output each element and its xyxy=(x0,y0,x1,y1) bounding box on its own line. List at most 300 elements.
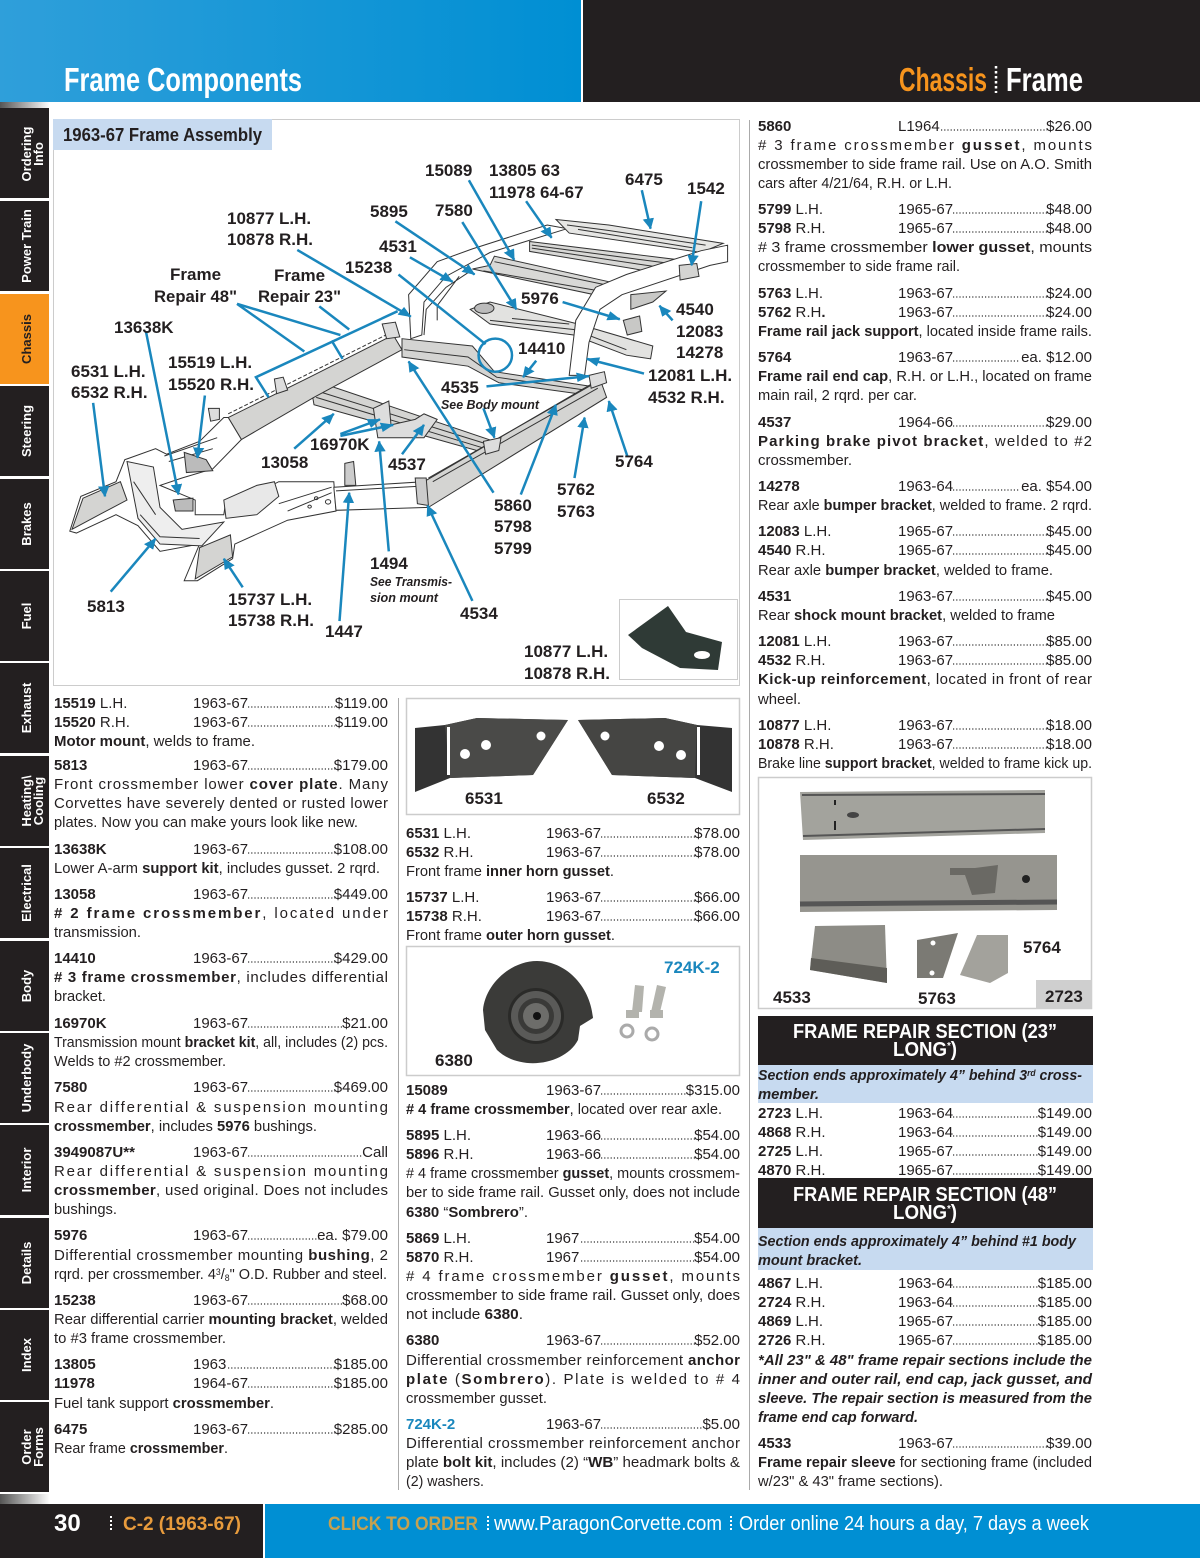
entry: 10877 support bracket: 1963-67 xyxy=(898,736,953,753)
entry: 15089 crossmember xyxy=(406,1082,740,1118)
entry: 5813 cover plate: Corvettes have severely dented or rusted lower xyxy=(54,795,388,812)
entry: 48 inch section prices: 2726 R.H. xyxy=(758,1332,826,1349)
entry: 13805 fuel tank support: 13805 xyxy=(54,1356,96,1373)
entry: 724K-2 bolt kit: $5.00 xyxy=(702,1416,740,1433)
note: repair sections include: inner and outer rail, end cap, jack gusset, and xyxy=(758,1371,1093,1388)
entry: 13638K support kit: $108.00 xyxy=(334,841,388,858)
sidebar navigation tabs xyxy=(0,108,49,1492)
entry: 4537 pivot bracket: Parking brake pivot bracket, welded to #2 xyxy=(758,433,1092,450)
banner: 48 inch frame repair section: * xyxy=(947,1204,951,1215)
heading: Frame Components: Frame Components xyxy=(64,61,302,98)
entry: 3949087U original crossmember: bushings. xyxy=(54,1201,117,1218)
part number labels: Repair 23" xyxy=(258,287,341,306)
entry: 15519 motor mount: 15520 R.H. xyxy=(54,714,130,731)
part number labels: 5976 xyxy=(521,289,559,308)
entry: 5895 gusset: 1963-66 xyxy=(546,1146,601,1163)
entry: 5895 gusset: # 4 frame crossmember gusset, mounts crossmem- xyxy=(406,1165,740,1182)
entry: 5869 gusset: not include 6380. xyxy=(406,1306,523,1323)
panel: 1963-67 frame assembly diagram xyxy=(53,119,740,686)
entry: 13058 crossmember xyxy=(54,886,388,941)
part number labels: 11978 64-67 xyxy=(489,183,584,202)
entry: 12083 bumper bracket: 4540 R.H. xyxy=(758,542,826,559)
entry: 5860 gusset: crossmember to side frame rail. Use on A.O. Smith xyxy=(758,156,1092,173)
entry: 15238 mounting bracket: 15238 xyxy=(54,1292,96,1309)
entry: 13638K support kit: 13638K xyxy=(54,841,107,858)
entry: 5976 bushing: 3 xyxy=(216,1267,221,1277)
entry: 12081 kick-up reinforcement: $85.00 xyxy=(1046,652,1092,669)
banner: 23 inch frame repair section: FRAME REPAIR SECTION (23” xyxy=(793,1021,1057,1043)
entry: 5764 end cap: Frame rail end cap, R.H. or L.H., located on frame xyxy=(758,368,1092,385)
entry: 23 inch section prices: 4868 R.H. xyxy=(758,1124,826,1141)
part number labels: 10877 L.H. xyxy=(227,209,311,228)
entry: 14278 bumper bracket: 14278 xyxy=(758,478,800,495)
entry: 15519 motor mount: 15519 L.H. xyxy=(54,695,127,712)
sidebar navigation tabs: Power Train xyxy=(19,209,34,283)
entry: 12081 kick-up reinforcement: 4532 R.H. xyxy=(758,652,826,669)
footer: page number and range: 30 xyxy=(54,1510,81,1537)
entry: 10877 support bracket xyxy=(758,717,1092,772)
entry: 724K-2 bolt kit: 1963-67 xyxy=(546,1416,601,1433)
part number labels: 1447 xyxy=(325,622,363,641)
entry: 13805 fuel tank support: $185.00 xyxy=(334,1375,388,1392)
entry: 5976 bushing: 1963-67 xyxy=(193,1227,248,1244)
photo: frame repair pieces: 5764 xyxy=(1023,938,1061,957)
entry: 15737 outer horn gusset: $66.00 xyxy=(694,908,740,925)
entry: 48 inch section prices: 4867 L.H. xyxy=(758,1275,823,1292)
entry: 5895 gusset: 5895 L.H. xyxy=(406,1127,471,1144)
part number labels: 13058 xyxy=(261,453,308,472)
entry: 15238 mounting bracket: $68.00 xyxy=(342,1292,388,1309)
header: black category band xyxy=(583,0,1200,102)
entry: 5976 bushing: 5976 xyxy=(54,1227,87,1244)
part number labels: 4531 xyxy=(379,237,417,256)
photo: frame repair pieces: 4533 xyxy=(773,988,811,1007)
photo: 6380 sombrero and 724K-2 bolt kit: 724K-2 xyxy=(664,958,720,977)
banner: 48 inch frame repair section: ) xyxy=(951,1202,957,1224)
entry: 7580 crossmember: Rear differential & suspension mounting xyxy=(54,1099,388,1116)
sidebar navigation tabs: Cooling xyxy=(31,777,46,825)
part number labels: 15520 R.H. xyxy=(168,375,254,394)
entry: 4531 shock mount bracket: Rear shock mount bracket, welded to frame xyxy=(758,607,1055,624)
entry: 5869 gusset: $54.00 xyxy=(694,1230,740,1247)
part number labels: 10878 R.H. xyxy=(524,664,610,683)
part number labels: 5813 xyxy=(87,597,125,616)
entry: 12083 bumper bracket: 1965-67 xyxy=(898,542,953,559)
column 2: parts list and photos xyxy=(406,698,740,1490)
entry: 7580 crossmember: 7580 xyxy=(54,1079,87,1096)
entry: 5869 gusset: 5870 R.H. xyxy=(406,1249,474,1266)
entry: 6531 inner horn gusset: 1963-67 xyxy=(546,844,601,861)
entry: 5799 lower gusset: $48.00 xyxy=(1046,220,1092,237)
entry: 4531 shock mount bracket xyxy=(758,588,1092,624)
part number labels: Repair 48" xyxy=(154,287,237,306)
part number labels: 5762 xyxy=(557,480,595,499)
entry: 5869 gusset: crossmember to side frame rail. Gusset only, does xyxy=(406,1287,740,1304)
part number labels: 16970K xyxy=(310,435,370,454)
entry: 23 inch section prices: $149.00 xyxy=(1038,1143,1092,1160)
part number labels: 5895 xyxy=(370,202,408,221)
entry: 14410 crossmember: # 3 frame crossmember, includes differential xyxy=(54,969,388,986)
entry: 5860 gusset: L1964 xyxy=(898,118,940,135)
part number labels: 14278 xyxy=(676,343,723,362)
entry: 724K-2 bolt kit: (2) washers. xyxy=(406,1473,484,1490)
footer: page number and range xyxy=(0,1504,263,1558)
entry: 6380 anchor plate: 6380 xyxy=(406,1332,439,1349)
part number labels: 15238 xyxy=(345,258,392,277)
note: section ends 4 inches behind body mount bracket: Section ends approximately 4” behind #1 body xyxy=(758,1233,1077,1250)
entry: 6531 inner horn gusset: $78.00 xyxy=(694,844,740,861)
entry: 5869 gusset: 1967 xyxy=(546,1230,579,1247)
entry: 23 inch section prices: 1963-64 xyxy=(898,1124,953,1141)
entry: 5799 lower gusset: 5799 L.H. xyxy=(758,201,823,218)
entry: 6475 rear crossmember: Rear frame crossmember. xyxy=(54,1440,228,1457)
entry: 15089 crossmember: 1963-67 xyxy=(546,1082,601,1099)
entry: 6380 anchor plate: $52.00 xyxy=(694,1332,740,1349)
note: repair sections include: *All 23" & 48" frame repair sections include the xyxy=(758,1352,1092,1369)
entry: 48 inch section prices: 1965-67 xyxy=(898,1313,953,1330)
entry: 15238 mounting bracket xyxy=(54,1292,388,1347)
entry: 5895 gusset: ber to side frame rail. Gusset only, does not include xyxy=(406,1184,740,1201)
entry: 4531 shock mount bracket: $45.00 xyxy=(1046,588,1092,605)
entry: 12083 bumper bracket xyxy=(758,523,1092,579)
entry: 4533 repair sleeve: w/23" & 43" frame sections). xyxy=(757,1473,943,1490)
entry: 15519 motor mount: Motor mount, welds to frame. xyxy=(54,733,255,750)
entry: 3949087U original crossmember: 1963-67 xyxy=(193,1144,248,1161)
entry: 16970K bracket kit: 16970K xyxy=(54,1015,107,1032)
entry: 724K-2 bolt kit xyxy=(406,1416,740,1490)
entry: 7580 crossmember: 1963-67 xyxy=(193,1079,248,1096)
part number labels: See Transmis- xyxy=(370,574,452,589)
entry: 48 inch section prices: $185.00 xyxy=(1038,1275,1092,1292)
entry: 7580 crossmember xyxy=(54,1079,388,1135)
entry: 5764 end cap: 5764 xyxy=(758,349,792,366)
entry: 6531 inner horn gusset: $78.00 xyxy=(694,825,740,842)
entry: 4533 repair sleeve: 1963-67 xyxy=(898,1435,953,1452)
entry: 15089 crossmember: $315.00 xyxy=(686,1082,740,1099)
entry: 5763 jack support xyxy=(758,285,1092,340)
photo: 6531 and 6532 gussets: 6531 xyxy=(465,789,503,808)
illustration: chassis frame xyxy=(70,220,728,581)
entry: 14278 bumper bracket xyxy=(758,478,1092,514)
entry: 10877 support bracket: $18.00 xyxy=(1046,717,1092,734)
sidebar navigation tabs: Order xyxy=(19,1429,34,1465)
entry: 48 inch section prices: 1963-64 xyxy=(898,1294,953,1311)
note: section ends 4 inches behind body mount bracket xyxy=(758,1228,1093,1270)
part number labels: 4535 xyxy=(441,378,479,397)
banner: 23 inch frame repair section: * xyxy=(947,1041,951,1052)
part number labels: 15738 R.H. xyxy=(228,611,314,630)
entry: 13805 fuel tank support: 1964-67 xyxy=(193,1375,248,1392)
entry: 12083 bumper bracket: 1965-67 xyxy=(898,523,953,540)
note: section ends 4 inches behind 3rd crossmember: member. xyxy=(758,1086,819,1103)
entry: 6475 rear crossmember xyxy=(54,1421,388,1457)
part number labels: 6532 R.H. xyxy=(71,383,148,402)
entry: 23 inch section prices: 2723 L.H. xyxy=(758,1105,823,1122)
entry: 13805 fuel tank support: Fuel tank support crossmember. xyxy=(54,1395,274,1412)
sidebar navigation tabs: Info xyxy=(31,142,46,166)
entry: 3949087U original crossmember: 3949087U** xyxy=(54,1144,135,1161)
inset photo: support bracket xyxy=(620,600,738,680)
entry: 15519 motor mount: 1963-67 xyxy=(193,714,248,731)
entry: 13805 fuel tank support: 11978 xyxy=(54,1375,95,1392)
entry: 13058 crossmember: transmission. xyxy=(54,924,141,941)
entry: 4537 pivot bracket xyxy=(758,414,1092,469)
part number labels: 10877 L.H. xyxy=(524,642,608,661)
entry: 13638K support kit: 1963-67 xyxy=(193,841,248,858)
entry: 12081 kick-up reinforcement: Kick-up reinforcement, located in front of rear xyxy=(758,671,1092,688)
entry: 5976 bushing: Differential crossmember mounting bushing, 2 xyxy=(54,1247,388,1264)
entry: 724K-2 bolt kit: Differential crossmember reinforcement anchor xyxy=(406,1435,740,1452)
entry: 5764 end cap xyxy=(758,349,1092,404)
entry: 16970K bracket kit: 1963-67 xyxy=(193,1015,248,1032)
entry: 15737 outer horn gusset: 15737 L.H. xyxy=(406,889,479,906)
sidebar navigation tabs: Exhaust xyxy=(19,682,34,733)
entry: 5895 gusset: 5896 R.H. xyxy=(406,1146,474,1163)
part number labels: 4537 xyxy=(388,455,426,474)
entry: 6531 inner horn gusset: 6532 R.H. xyxy=(406,844,474,861)
entry: 5976 bushing xyxy=(54,1227,388,1283)
entry: 4533 repair sleeve: $39.00 xyxy=(1046,1435,1092,1452)
sidebar navigation tabs: Ordering xyxy=(19,126,34,181)
sidebar navigation tabs: Interior xyxy=(19,1148,34,1192)
entry: 48 inch section prices: $185.00 xyxy=(1038,1294,1092,1311)
entry: 5860 gusset: cars after 4/21/64, R.H. or L.H. xyxy=(758,175,952,192)
sidebar navigation tabs: Details xyxy=(19,1242,34,1284)
entry: 23 inch section prices xyxy=(758,1105,1092,1179)
part number labels: 5860 xyxy=(494,496,532,515)
part number labels: 15737 L.H. xyxy=(228,590,312,609)
sidebar navigation tabs: Fuel xyxy=(19,603,34,629)
entry: 23 inch section prices: $149.00 xyxy=(1038,1124,1092,1141)
header: blue section band xyxy=(0,0,581,102)
part number labels: 6475 xyxy=(625,170,663,189)
part number labels: 5798 xyxy=(494,517,532,536)
entry: 6531 inner horn gusset: 6531 L.H. xyxy=(406,825,471,842)
entry: 12083 bumper bracket: Rear axle bumper bracket, welded to frame. xyxy=(758,562,1053,579)
entry: 12083 bumper bracket: $45.00 xyxy=(1046,523,1092,540)
entry: 14278 bumper bracket: Rear axle bumper bracket, welded to frame. 2 rqrd. xyxy=(758,497,1092,514)
entry: 14278 bumper bracket: 1963-64 xyxy=(898,478,953,495)
entry: 6475 rear crossmember: 1963-67 xyxy=(193,1421,248,1438)
entry: 15519 motor mount xyxy=(54,695,388,750)
entry: 5799 lower gusset: $48.00 xyxy=(1046,201,1092,218)
note: section ends 4 inches behind body mount bracket: mount bracket. xyxy=(758,1252,862,1269)
callout arrows xyxy=(93,180,701,621)
heading: frame assembly: 1963-67 Frame Assembly xyxy=(63,125,262,145)
entry: 5976 bushing: / xyxy=(221,1266,226,1283)
entry: 48 inch section prices xyxy=(758,1275,1092,1349)
entry: 5763 jack support: $24.00 xyxy=(1046,304,1092,321)
entry: 5860 gusset: 5860 xyxy=(758,118,791,135)
banner: 23 inch frame repair section xyxy=(758,1016,1093,1065)
part number labels: 4532 R.H. xyxy=(648,388,725,407)
entry: 5764 end cap: 1963-67 xyxy=(898,349,953,366)
photo: frame repair pieces xyxy=(758,778,1092,1009)
part number labels: 5799 xyxy=(494,539,532,558)
banner: 48 inch frame repair section: FRAME REPAIR SECTION (48” xyxy=(793,1184,1057,1206)
note: section ends 4 inches behind 3rd crossmember: cross- xyxy=(1036,1067,1082,1084)
part number labels: 5764 xyxy=(615,452,653,471)
entry: 15519 motor mount: $119.00 xyxy=(335,695,388,712)
photo: frame repair pieces: 5763 xyxy=(918,989,956,1008)
entry: 724K-2 bolt kit: 724K-2 xyxy=(406,1416,455,1433)
footer: order call to action: CLICK TO ORDER xyxy=(328,1514,478,1535)
entry: 5860 gusset: $26.00 xyxy=(1046,118,1092,135)
entry: 10877 support bracket: 10878 R.H. xyxy=(758,736,834,753)
part number labels: 4534 xyxy=(460,604,498,623)
entry: 12081 kick-up reinforcement: wheel. xyxy=(757,691,801,708)
sidebar navigation tabs: Steering xyxy=(19,405,34,457)
entry: 13638K support kit xyxy=(54,841,388,877)
entry: 5763 jack support: Frame rail jack support, located inside frame rails. xyxy=(758,323,1092,340)
entry: 6531 inner horn gusset: 1963-67 xyxy=(546,825,601,842)
entry: 5976 bushing: ea. $79.00 xyxy=(317,1227,388,1244)
entry: 5895 gusset: $54.00 xyxy=(694,1146,740,1163)
photo: frame repair pieces: 2723 xyxy=(1045,987,1083,1006)
entry: 6475 rear crossmember: $285.00 xyxy=(334,1421,388,1438)
entry: 4531 shock mount bracket: 4531 xyxy=(758,588,791,605)
entry: 5764 end cap: main rail, 2 rqrd. per car. xyxy=(758,387,917,404)
entry: 15737 outer horn gusset: 15738 R.H. xyxy=(406,908,482,925)
entry: 5764 end cap: ea. $12.00 xyxy=(1021,349,1092,366)
photo: 6531 and 6532 gussets: 6532 xyxy=(647,789,685,808)
column 3: parts list xyxy=(757,118,1093,1490)
sidebar navigation tabs: Underbody xyxy=(19,1043,34,1112)
part number labels: 1542 xyxy=(687,179,725,198)
entry: 5799 lower gusset xyxy=(758,201,1092,275)
entry: 13638K support kit: Lower A-arm support kit, includes gusset. 2 rqrd. xyxy=(54,860,380,877)
note: section ends 4 inches behind 3rd crossmember xyxy=(758,1065,1093,1103)
entry: 12083 bumper bracket: $45.00 xyxy=(1046,542,1092,559)
entry: 13058 crossmember: $449.00 xyxy=(334,886,388,903)
entry: 15737 outer horn gusset: Front frame outer horn gusset. xyxy=(406,927,615,944)
entry: 5763 jack support: 5762 R.H. xyxy=(758,304,826,321)
entry: 23 inch section prices: $149.00 xyxy=(1038,1162,1092,1179)
entry: 13058 crossmember: 1963-67 xyxy=(193,886,248,903)
note: repair sections include: frame end cap forward. xyxy=(758,1409,918,1426)
sidebar navigation tabs: Body xyxy=(19,969,34,1002)
photo: 6531 and 6532 gussets xyxy=(406,698,740,814)
entry: 5895 gusset: 1963-66 xyxy=(546,1127,601,1144)
entry: 13805 fuel tank support: $185.00 xyxy=(334,1356,388,1373)
entry: 13058 crossmember: 13058 xyxy=(54,886,96,903)
sidebar navigation tabs: Forms xyxy=(31,1427,46,1467)
entry: 12083 bumper bracket: 12083 L.H. xyxy=(758,523,831,540)
entry: 5799 lower gusset: 5798 R.H. xyxy=(758,220,826,237)
entry: 10877 support bracket: Brake line support bracket, welded to frame kick up. xyxy=(758,755,1092,772)
part number labels: 13638K xyxy=(114,318,174,337)
entry: 16970K bracket kit: Welds to #2 crossmember. xyxy=(54,1053,226,1070)
sidebar navigation tabs: Electrical xyxy=(19,864,34,922)
entry: 6380 anchor plate: 1963-67 xyxy=(546,1332,601,1349)
entry: 15089 crossmember: 15089 xyxy=(406,1082,448,1099)
entry: 6380 anchor plate: Differential crossmember reinforcement anchor xyxy=(406,1352,740,1369)
entry: 5799 lower gusset: 1965-67 xyxy=(898,220,953,237)
entry: 6380 anchor plate: plate (Sombrero). Plate is welded to # 4 xyxy=(406,1371,740,1388)
entry: 724K-2 bolt kit: plate bolt kit, includes (2) “WB” headmark bolts & xyxy=(406,1454,740,1471)
entry: 15238 mounting bracket: Rear differential carrier mounting bracket, welded xyxy=(54,1311,388,1328)
entry: 14410 crossmember xyxy=(54,950,388,1005)
entry: 23 inch section prices: 1963-64 xyxy=(898,1105,953,1122)
entry: 3949087U original crossmember: Rear differential & suspension mounting xyxy=(54,1163,388,1180)
entry: 15238 mounting bracket: to #3 frame crossmember. xyxy=(54,1330,226,1347)
note: repair sections include xyxy=(758,1352,1093,1426)
entry: 12081 kick-up reinforcement: 1963-67 xyxy=(898,633,953,650)
entry: 23 inch section prices: 2725 L.H. xyxy=(758,1143,823,1160)
entry: 5869 gusset: $54.00 xyxy=(694,1249,740,1266)
entry: 5869 gusset: # 4 frame crossmember gusset, mounts xyxy=(406,1268,740,1285)
entry: 4537 pivot bracket: 4537 xyxy=(758,414,791,431)
entry: 14410 crossmember: 14410 xyxy=(54,950,96,967)
note: section ends 4 inches behind 3rd crossmember: rd xyxy=(1027,1068,1036,1078)
part number labels: Frame xyxy=(170,265,221,284)
entry: 48 inch section prices: $185.00 xyxy=(1038,1313,1092,1330)
entry: 13805 fuel tank support xyxy=(54,1356,388,1412)
entry: 7580 crossmember: $469.00 xyxy=(334,1079,388,1096)
entry: 4533 repair sleeve: Frame repair sleeve for sectioning frame (included xyxy=(758,1454,1092,1471)
entry: 5813 cover plate: 1963-67 xyxy=(193,757,248,774)
entry: 5860 gusset: # 3 frame crossmember gusset, mounts xyxy=(758,137,1092,154)
entry: 5860 gusset xyxy=(758,118,1092,192)
entry: 4533 repair sleeve: 4533 xyxy=(758,1435,791,1452)
entry: 3949087U original crossmember: Call xyxy=(362,1144,388,1161)
header: black category band: Frame xyxy=(1006,61,1083,98)
footer: order call to action xyxy=(265,1504,1200,1558)
entry: 48 inch section prices: 1963-64 xyxy=(898,1275,953,1292)
part number labels: sion mount xyxy=(370,590,439,605)
entry: 6531 inner horn gusset: Front frame inner horn gusset. xyxy=(406,863,614,880)
entry: 13805 fuel tank support: 1963 xyxy=(193,1356,226,1373)
entry: 15737 outer horn gusset: 1963-67 xyxy=(546,889,601,906)
entry: 14410 crossmember: $429.00 xyxy=(334,950,388,967)
banner: 23 inch frame repair section: ) xyxy=(951,1039,957,1061)
entry: 5763 jack support: 1963-67 xyxy=(898,285,953,302)
entry: 10877 support bracket: 10877 L.H. xyxy=(758,717,831,734)
entry: 5813 cover plate xyxy=(54,757,388,831)
entry: 48 inch section prices: 1965-67 xyxy=(898,1332,953,1349)
part number labels: 13805 63 xyxy=(489,161,560,180)
entry: 6531 inner horn gusset xyxy=(406,825,740,880)
part number labels: 5763 xyxy=(557,502,595,521)
entry: 6380 anchor plate: crossmember gusset. xyxy=(406,1390,547,1407)
entry: 15737 outer horn gusset: $66.00 xyxy=(694,889,740,906)
entry: 48 inch section prices: 4869 L.H. xyxy=(758,1313,823,1330)
entry: 5869 gusset: 1967 xyxy=(546,1249,579,1266)
entry: 15089 crossmember: # 4 frame crossmember, located over rear axle. xyxy=(406,1101,722,1118)
entry: 4533 repair sleeve xyxy=(757,1435,1092,1490)
entry: 4531 shock mount bracket: 1963-67 xyxy=(898,588,953,605)
sidebar navigation tabs: Chassis xyxy=(19,314,34,364)
part number labels: 7580 xyxy=(435,201,473,220)
entry: 48 inch section prices: 2724 R.H. xyxy=(758,1294,826,1311)
photo: 6380 sombrero and 724K-2 bolt kit xyxy=(406,946,740,1076)
entry: 5763 jack support: 5763 L.H. xyxy=(758,285,823,302)
entry: 12081 kick-up reinforcement: 12081 L.H. xyxy=(758,633,831,650)
entry: 5895 gusset: $54.00 xyxy=(694,1127,740,1144)
entry: 15519 motor mount: $119.00 xyxy=(335,714,388,731)
entry: 5799 lower gusset: 1965-67 xyxy=(898,201,953,218)
entry: 3949087U original crossmember xyxy=(54,1144,388,1218)
entry: 12081 kick-up reinforcement xyxy=(757,633,1092,708)
entry: 16970K bracket kit: $21.00 xyxy=(342,1015,388,1032)
entry: 16970K bracket kit xyxy=(54,1015,388,1070)
entry: 14410 crossmember: 1963-67 xyxy=(193,950,248,967)
part number labels: 14410 xyxy=(518,339,565,358)
entry: 5869 gusset: 5869 L.H. xyxy=(406,1230,471,1247)
entry: 10877 support bracket: 1963-67 xyxy=(898,717,953,734)
part number labels: 10878 R.H. xyxy=(227,230,313,249)
part number labels: 1494 xyxy=(370,554,408,573)
